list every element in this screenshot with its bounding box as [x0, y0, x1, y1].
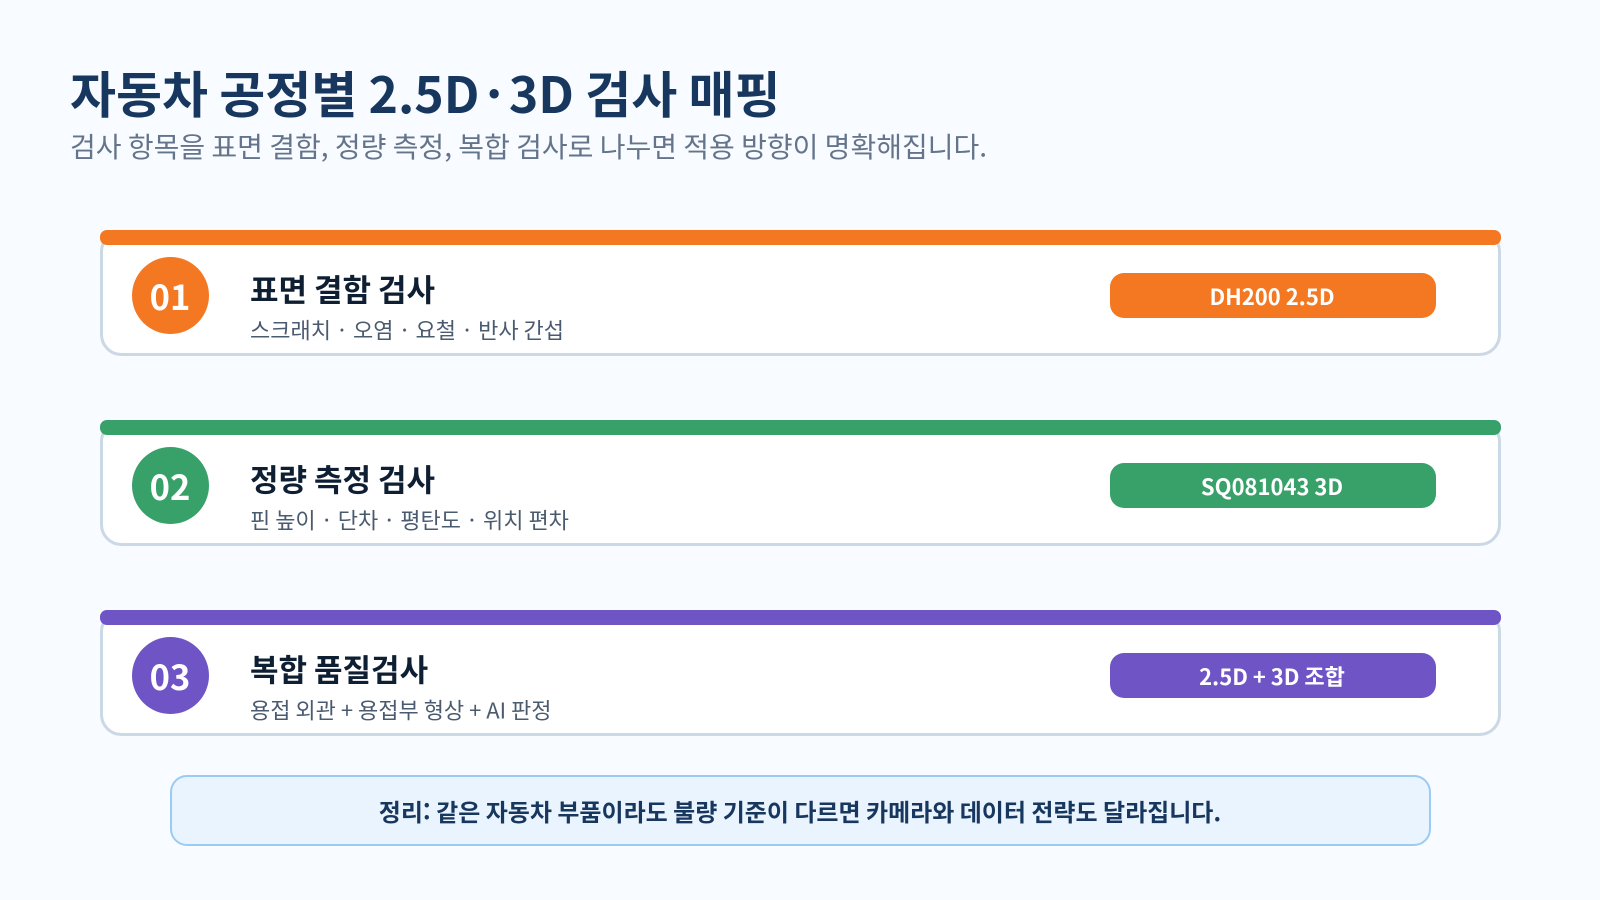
tag pill: SQ081043 3D: SQ081043 3D [1201, 470, 1343, 502]
number badge 02: 02 [150, 460, 190, 510]
tag pill: 2.5D + 3D 조합 [1110, 653, 1436, 698]
title: 자동차 공정별 2.5D·3D 검사 매핑 [70, 56, 781, 128]
callout: summary [171, 776, 1430, 845]
number badge 03: 03 [150, 650, 190, 700]
number badge 02 [132, 447, 209, 524]
panel: composite quality inspection [100, 610, 1501, 734]
panel details: 핀 높이 · 단차 · 평탄도 · 위치 편차 [250, 504, 569, 536]
subtitle: 검사 항목을 표면 결함, 정량 측정, 복합 검사로 나누면 적용 방향이 명확해집니다. [70, 126, 987, 166]
panel heading: 복합 품질검사 [250, 646, 428, 690]
tag pill: SQ081043 3D [1110, 463, 1436, 508]
accent bar: orange [100, 230, 1501, 245]
panel details: 스크래치 · 오염 · 요철 · 반사 간섭 [250, 314, 564, 346]
accent bar: purple [100, 610, 1501, 625]
number badge 01 [132, 257, 209, 334]
tag pill: DH200 2.5D: DH200 2.5D [1209, 280, 1335, 312]
callout: summary: 정리: 같은 자동차 부품이라도 불량 기준이 다르면 카메라와 데이터 전략도 달라집니다. [379, 793, 1221, 828]
panel: surface defect inspection [100, 230, 1501, 354]
panel details: 용접 외관 + 용접부 형상 + AI 판정 [250, 694, 552, 726]
panel: quantitative measurement inspection [100, 420, 1501, 544]
panel heading: 정량 측정 검사 [250, 456, 435, 500]
tag pill: 2.5D + 3D 조합: 2.5D + 3D 조합 [1199, 660, 1345, 692]
number badge 01: 01 [150, 270, 190, 320]
panel heading: 표면 결함 검사 [250, 266, 435, 310]
tag pill: DH200 2.5D [1110, 273, 1436, 318]
accent bar: green [100, 420, 1501, 435]
number badge 03 [132, 637, 209, 714]
